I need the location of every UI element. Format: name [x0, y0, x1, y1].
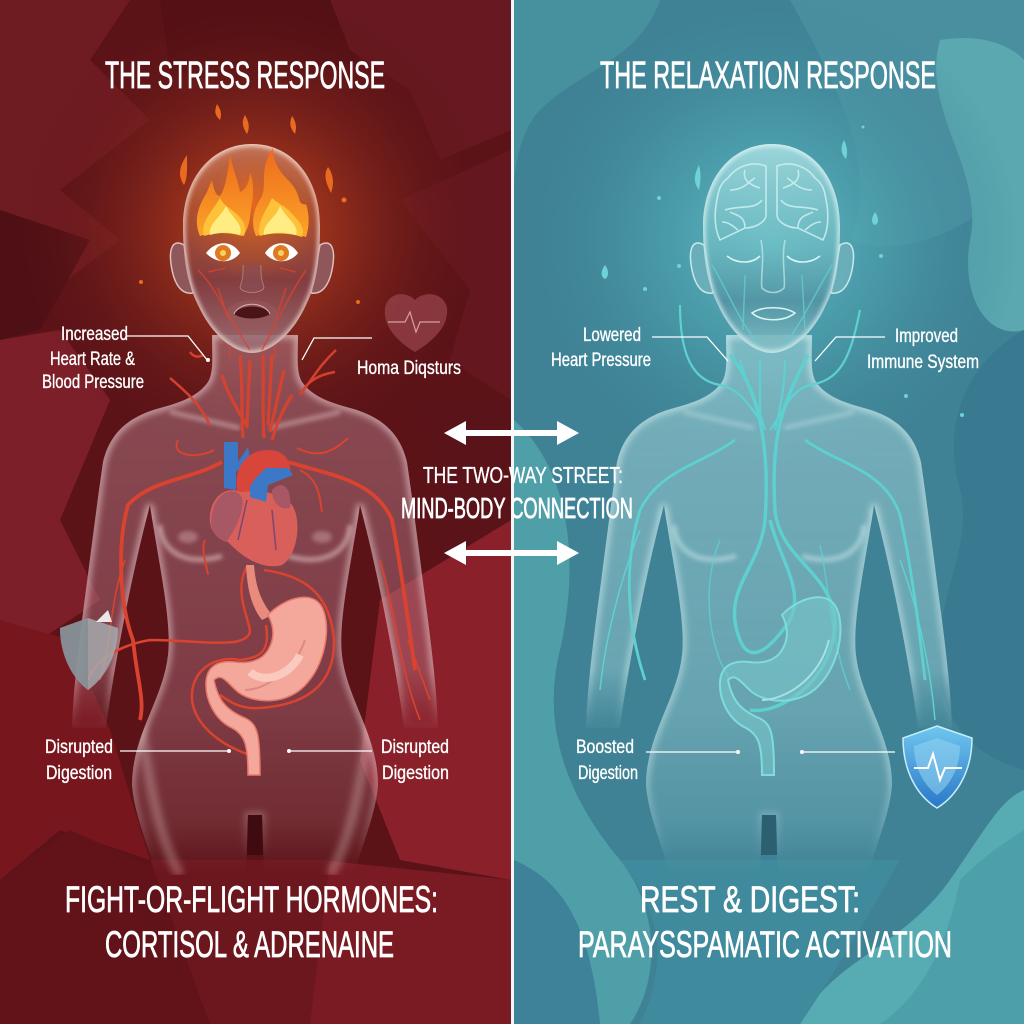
body silhouette	[72, 335, 438, 875]
heading: rest and digest: REST & DIGEST:	[640, 879, 860, 920]
label: disrupted digestion right	[381, 737, 449, 784]
label: improved immune system: Immune System	[867, 352, 979, 373]
label: homa diqsturs: Homa Diqsturs	[357, 358, 461, 379]
panel: relaxation response background	[514, 0, 1024, 1024]
label: disrupted digestion right: Digestion	[382, 763, 449, 784]
label: boosted digestion: Boosted	[576, 737, 634, 758]
arrow: top two-way	[444, 421, 579, 445]
icon: blue shield with pulse	[903, 726, 972, 808]
veins: face and neck	[170, 268, 336, 440]
eyes	[206, 243, 298, 292]
label: improved immune system: Improved	[895, 326, 958, 347]
veins: face, neck and torso	[600, 265, 935, 720]
title: the stress response: THE STRESS RESPONSE	[105, 55, 385, 97]
heart	[210, 442, 297, 566]
stomach outline	[720, 597, 840, 775]
figure: stressed body	[72, 144, 438, 875]
stomach and oesophagus	[206, 565, 326, 775]
icon: cracked grey shield	[60, 610, 118, 690]
mouth	[226, 300, 278, 330]
ears	[170, 243, 334, 293]
label: increased heart rate and blood pressure	[42, 324, 144, 393]
heading: fight-or-flight hormones: FIGHT-OR-FLIGHT HORMONES:	[65, 879, 438, 920]
label: lowered heart pressure	[551, 325, 651, 371]
heading: rest and digest	[578, 879, 952, 965]
label: lowered heart pressure: Lowered	[583, 325, 641, 346]
icon: flames in brain	[197, 148, 309, 237]
label: increased heart rate and blood pressure: Blood Pressure	[42, 372, 144, 393]
heading: fight-or-flight hormones	[65, 879, 438, 965]
ears and head	[690, 144, 854, 353]
figure: relaxed body	[586, 144, 952, 875]
divider between panels	[511, 0, 514, 1024]
label: disrupted digestion right: Disrupted	[381, 737, 449, 758]
body silhouette	[586, 335, 952, 875]
centre caption: mind-body connection: THE TWO-WAY STREET:	[423, 462, 623, 488]
leader lines	[120, 336, 895, 752]
decorative: stress sparks and flames	[139, 104, 360, 304]
label: disrupted digestion left	[45, 737, 113, 784]
label: disrupted digestion left: Disrupted	[45, 737, 113, 758]
veins: arms and torso	[88, 438, 430, 755]
arrow: bottom two-way	[444, 541, 579, 565]
heading: fight-or-flight hormones: CORTISOL & ADRENAINE	[105, 924, 394, 965]
face: closed eyes, nose and lips	[727, 240, 820, 320]
label: increased heart rate and blood pressure: Heart Rate &	[50, 349, 135, 370]
icon: faded heart with pulse	[385, 294, 447, 352]
icon: brain	[715, 164, 828, 240]
decorative: calm droplets	[602, 126, 964, 417]
crotch slit	[247, 815, 263, 855]
centre caption: mind-body connection	[401, 462, 633, 525]
centre caption: mind-body connection: MIND-BODY CONNECTION	[401, 493, 633, 525]
panel: stress response background	[0, 0, 511, 1024]
label: boosted digestion: Digestion	[578, 763, 638, 784]
head	[183, 144, 320, 353]
label: increased heart rate and blood pressure: Increased	[61, 324, 128, 345]
label: disrupted digestion left: Digestion	[46, 763, 112, 784]
label: improved immune system	[867, 326, 979, 373]
label: lowered heart pressure: Heart Pressure	[551, 350, 651, 371]
label: boosted digestion	[576, 737, 638, 784]
